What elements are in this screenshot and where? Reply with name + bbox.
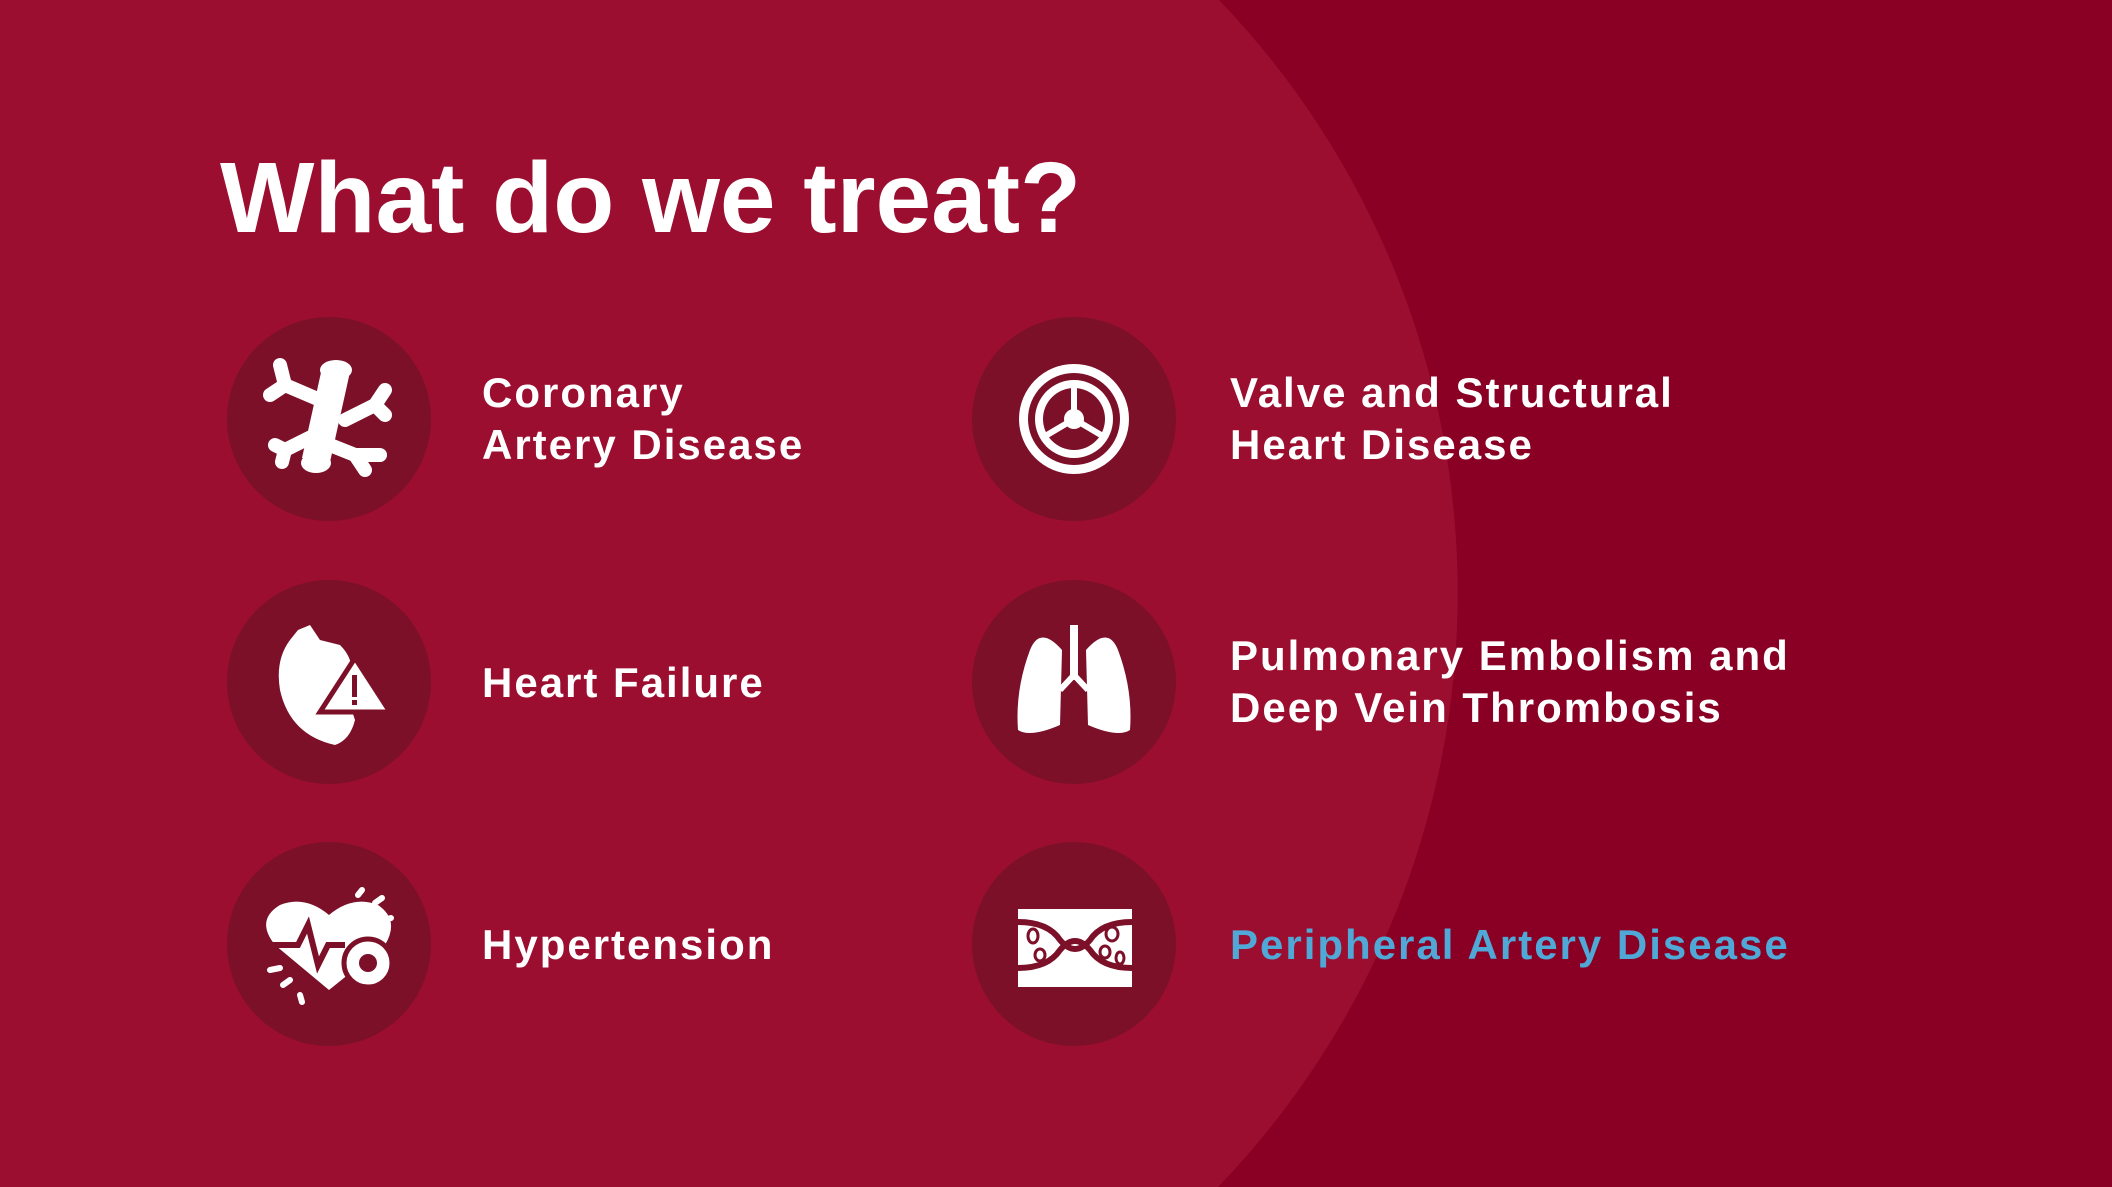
icon: heart with warning xyxy=(227,580,431,784)
item: coronary artery disease xyxy=(227,317,804,521)
icon: artery with plaque xyxy=(972,842,1176,1046)
icon: heart with pulse xyxy=(227,842,431,1046)
label: Peripheral Artery Disease xyxy=(1230,921,1790,968)
item: heart failure xyxy=(227,580,765,784)
label: Deep Vein Thrombosis xyxy=(1230,684,1723,731)
title: What do we treat? xyxy=(220,142,1081,254)
label: Artery Disease xyxy=(482,421,804,468)
label: Valve and Structural xyxy=(1230,369,1674,416)
item: hypertension xyxy=(227,842,774,1046)
label: Pulmonary Embolism and xyxy=(1230,632,1790,679)
item: valve and structural heart disease xyxy=(972,317,1674,521)
label: Heart Disease xyxy=(1230,421,1534,468)
item: pulmonary embolism and DVT xyxy=(972,580,1790,784)
icon: coronary artery xyxy=(227,317,431,521)
item: peripheral artery disease xyxy=(972,842,1790,1046)
icon: lungs xyxy=(972,580,1176,784)
icon: valve xyxy=(972,317,1176,521)
label: Hypertension xyxy=(482,921,774,968)
label: Coronary xyxy=(482,369,685,416)
label: Heart Failure xyxy=(482,659,765,706)
